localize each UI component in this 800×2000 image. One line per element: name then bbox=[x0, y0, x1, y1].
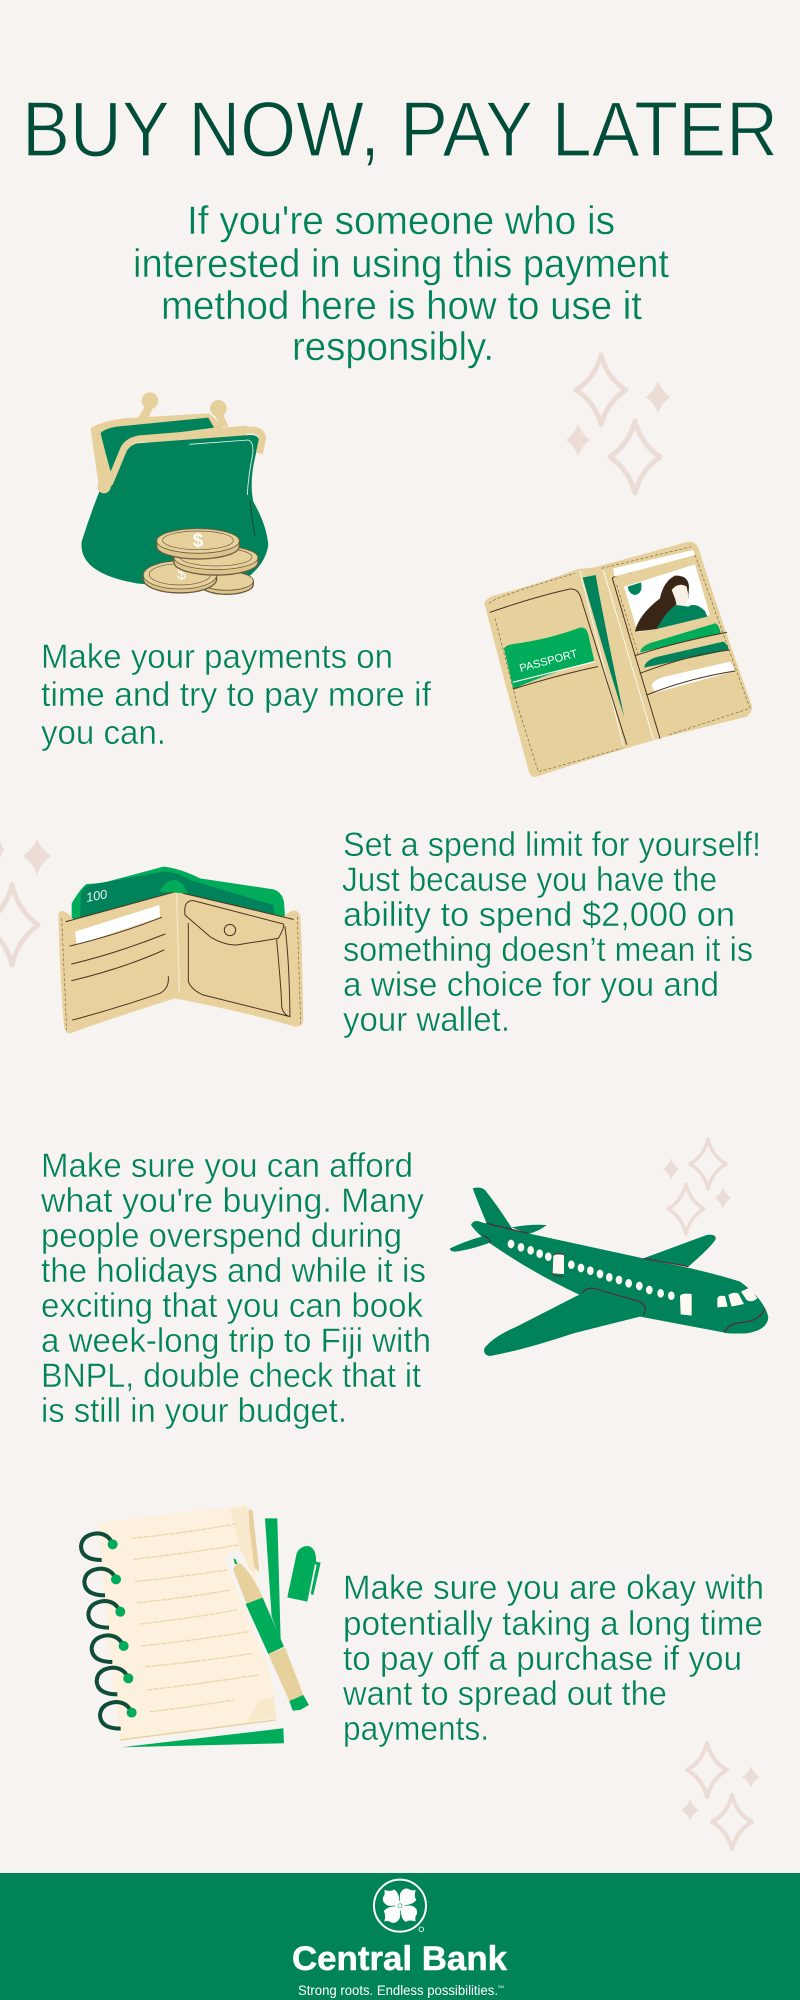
windows bbox=[508, 1240, 757, 1316]
coins: $ bbox=[177, 564, 186, 583]
intro text bbox=[133, 199, 669, 369]
icon: airplane bbox=[450, 1187, 768, 1356]
text block: step 1: time and try to pay more if bbox=[41, 676, 432, 714]
icon: bifold wallet: 100 bbox=[85, 887, 108, 905]
text block: step 2: your wallet. bbox=[343, 1001, 510, 1039]
text block: step 2 bbox=[342, 826, 761, 1039]
cards bbox=[640, 623, 721, 652]
icon: notebook and pen bbox=[81, 1505, 321, 1747]
icon: passport holder bbox=[484, 542, 752, 777]
top white strip bbox=[613, 550, 695, 577]
text block: step 3: BNPL, double check that it bbox=[41, 1357, 422, 1395]
spiral rings bbox=[81, 1533, 132, 1729]
passport booklet: PASSPORT bbox=[518, 648, 579, 675]
text block: step 3: Make sure you can afford bbox=[41, 1147, 413, 1185]
text block: step 1 bbox=[41, 638, 432, 752]
intro text: If you're someone who is bbox=[187, 199, 615, 243]
text block: step 4: payments. bbox=[343, 1710, 489, 1748]
pocket flap bbox=[185, 901, 284, 945]
sparkles: top bbox=[566, 355, 670, 493]
text block: step 2: something doesn’t mean it is bbox=[343, 931, 753, 969]
text block: step 3: people overspend during bbox=[41, 1217, 402, 1255]
sparkles: bottom right bbox=[681, 1743, 760, 1849]
text block: step 4: to pay off a purchase if you bbox=[343, 1640, 742, 1678]
text block: step 2: a wise choice for you and bbox=[343, 966, 719, 1004]
ID photo bbox=[624, 564, 710, 632]
icon: bifold wallet bbox=[58, 867, 303, 1033]
text block: step 3: what you're buying. Many bbox=[40, 1182, 424, 1220]
footer band bbox=[0, 1873, 800, 2000]
text block: step 2: Just because you have the bbox=[342, 861, 717, 899]
logo: Central Bank: SM bbox=[498, 1984, 504, 1989]
green strip bbox=[583, 575, 624, 718]
notebook page bbox=[98, 1505, 277, 1740]
pen bbox=[233, 1558, 309, 1711]
passport booklet bbox=[504, 628, 598, 689]
logo: Central Bank bbox=[292, 1880, 507, 1998]
sparkles: near plane bbox=[663, 1139, 731, 1234]
text block: step 3: a week-long trip to Fiji with bbox=[41, 1322, 431, 1360]
icon: coin purse bbox=[81, 392, 268, 594]
text block: step 4 bbox=[342, 1569, 764, 1748]
pen cap bbox=[287, 1546, 321, 1602]
text block: step 3 bbox=[40, 1147, 431, 1430]
text block: step 4: Make sure you are okay with bbox=[343, 1569, 764, 1607]
intro text: method here is how to use it bbox=[161, 284, 642, 328]
white card bbox=[75, 905, 160, 945]
text block: step 2: ability to spend $2,000 on bbox=[343, 896, 735, 934]
coins: $ bbox=[193, 530, 204, 551]
text block: step 4: want to spread out the bbox=[342, 1675, 667, 1713]
coins bbox=[143, 529, 258, 594]
intro text: interested in using this payment bbox=[133, 242, 669, 286]
sparkles: left edge bbox=[0, 839, 51, 965]
text block: step 4: potentially taking a long time bbox=[343, 1605, 763, 1643]
logo: Central Bank: Central Bank bbox=[292, 1940, 507, 1978]
intro text: responsibly. bbox=[292, 325, 494, 369]
text block: step 3: is still in your budget. bbox=[41, 1392, 347, 1430]
logo: Central Bank: Strong roots. Endless possibilities. bbox=[298, 1982, 498, 1998]
text block: step 1: you can. bbox=[41, 714, 166, 752]
text block: step 1: Make your payments on bbox=[41, 638, 393, 676]
text block: step 3: exciting that you can book bbox=[41, 1287, 424, 1325]
text block: step 3: the holidays and while it is bbox=[41, 1252, 426, 1290]
text block: step 2: Set a spend limit for yourself! bbox=[343, 826, 761, 864]
